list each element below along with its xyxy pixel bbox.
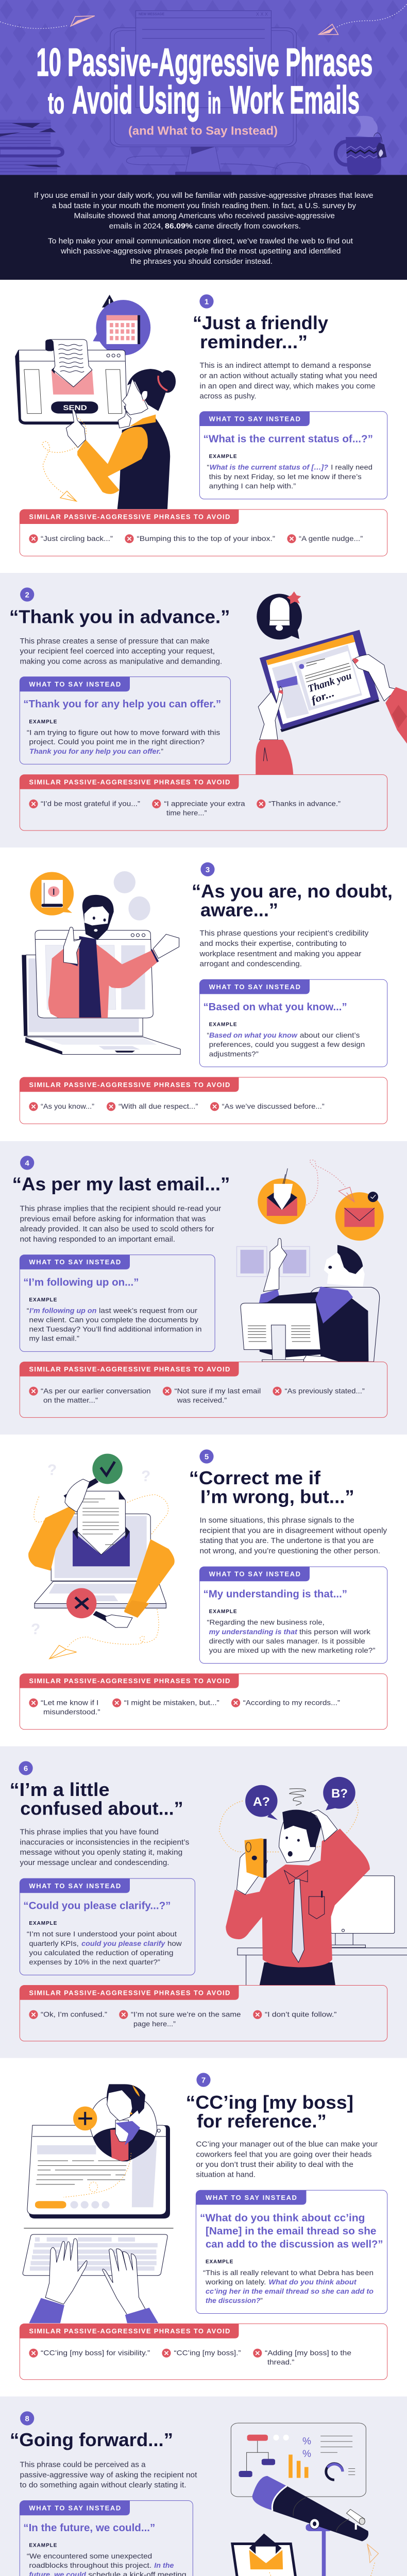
example text: preferences, could you suggest a few design [209,1041,365,1048]
example text: anything I can help with.” [209,482,296,490]
description: This phrase implies that you have found [20,1828,159,1837]
tab label: SIMILAR PASSIVE-AGGRESSIVE PHRASES TO AVOID [29,513,230,521]
tab label: SIMILAR PASSIVE-AGGRESSIVE PHRASES TO AVOID [29,1677,230,1685]
example text: Based on what you know [209,1031,298,1039]
description: or an action without actually stating what you need [200,372,377,380]
description: in an open and direct way, which makes you come [200,382,375,391]
example text: ” [260,2297,263,2304]
description: This phrase could be perceived as a [20,2461,146,2469]
avoid item 1: “As per our earlier conversation [41,1386,151,1395]
avoid item 3: “According to my records...” [243,1698,340,1706]
panel: similar phrases to avoid [20,1077,387,1124]
panel: what to say instead [20,2501,193,2576]
description [200,362,377,401]
suggested phrase: “What do you think about cc’ing [200,2212,365,2224]
number badge [199,1449,214,1464]
description: across as pushy. [200,393,257,401]
number badge: 3 [206,866,210,874]
avoid item 2: “Not sure if my last email [175,1386,261,1395]
avoid item 2: “I might be mistaken, but...” [124,1698,219,1706]
panel: what to say instead [199,412,387,499]
tab label [20,1878,130,1893]
subtitle: (and What to Say Instead) [128,124,278,137]
tab label: WHAT TO SAY INSTEAD [206,2194,297,2201]
avoid item 2: “CC’ing [my boss].” [174,2348,241,2357]
chart percent marks: % [302,2436,311,2447]
section 5 [0,1434,407,1747]
number badge: 5 [205,1453,209,1461]
section 2 [0,573,407,848]
panel: similar phrases to avoid [20,775,387,831]
avoid item 2: was received.” [177,1396,227,1404]
example text: cc’ing her in the email thread so she can add to [206,2287,374,2295]
heading: for reference.” [197,2110,327,2131]
example text: expenses by 10% in the next quarter?” [29,1958,160,1966]
title: to [48,87,64,120]
example text: “Regarding the new business role, [207,1619,325,1626]
avoid item 3 [253,2348,351,2366]
description: coworkers feel that you are going over their heads [196,2150,372,2159]
illustration: confused man with phone [219,1777,407,1985]
intro paragraph one: a bad taste in your mouth the moment you finish reading them. In fact, a U.S. survey by [52,202,357,210]
avoid item 2: time here...” [166,809,207,817]
example text: next Tuesday? You’ll find additional information in [29,1326,202,1333]
intro paragraph one: Mailsuite showed that among Americans who received passive-aggressive [74,212,335,221]
intro paragraph one [34,192,373,230]
description [196,2140,378,2179]
suggested phrase [200,2212,383,2250]
description: not wrong, and you’re questioning the other person. [200,1547,380,1555]
avoid item 2: page here...” [133,2020,176,2028]
example text: What do you think about [268,2278,357,2286]
example text [27,1930,182,1966]
heading [186,2092,353,2131]
tab label [20,1255,130,1269]
description: or you don’t trust their ability to deal with the [196,2161,353,2169]
panel: what to say instead [20,1255,215,1351]
example text [207,1619,376,1654]
avoid item 1: “Let me know if I [41,1698,98,1706]
description [20,1205,221,1244]
description: situation at hand. [196,2171,256,2179]
avoid item 3: “I don’t quite follow.” [265,2010,337,2018]
description: This phrase implies that the recipient should re-read your [20,1205,221,1213]
section 7 [0,2058,407,2397]
example text: In the [154,2562,174,2569]
tab label [20,2324,239,2338]
tab label [20,1674,239,1688]
example text: working on lately. [205,2278,266,2286]
tab label: SIMILAR PASSIVE-AGGRESSIVE PHRASES TO AVOID [29,778,230,786]
heading: I’m wrong, but...” [200,1486,354,1507]
avoid item 3: thread.” [267,2358,295,2366]
illustration: man pointing up at desk with envelopes [236,1160,384,1362]
description [20,2461,197,2489]
example text: “We encountered some unexpected [27,2552,152,2560]
suggested phrase: “In the future, we could...” [23,2522,155,2534]
panel: similar phrases to avoid [20,510,387,556]
intro panel [0,175,407,280]
suggested phrase: “What is the current status of...?” [203,433,373,445]
question marks: ? [47,1462,57,1479]
example text: quarterly KPIs, [29,1940,79,1947]
section 1 [0,280,407,573]
intro paragraph two: the phrases you should consider instead. [130,258,273,266]
description: inaccuracies or inconsistencies in the recipient’s [20,1839,189,1847]
avoid item 2: “I’m not sure we’re on the same [131,2010,241,2018]
example text: directly with our sales manager. Is it possible [209,1637,365,1645]
new message window label [139,11,268,16]
example text: “This is all really relevant to what Debra has been [203,2269,374,2277]
avoid item 2: “I appreciate your extra [164,800,245,808]
example label: EXAMPLE [209,1609,237,1615]
chart percent marks: % [302,2449,311,2460]
new message window label: X X X [256,11,268,16]
example text: you are mixed up with the new marketing role?” [209,1647,376,1654]
example label: EXAMPLE [29,1297,57,1303]
panel: what to say instead [199,1567,387,1663]
tablet handwritten note: for... [310,687,336,706]
avoid item 2 [163,1386,261,1404]
avoid item 1: “Ok, I’m confused.” [41,2010,107,2018]
tablet handwritten note [307,670,353,706]
description [20,637,222,666]
heading [193,312,328,352]
intro paragraph one: came directly from coworkers. [195,222,301,230]
illustration: telescope looking at email on laptop [230,2423,379,2576]
heading: “Just a friendly [193,312,328,333]
hero banner [0,0,407,175]
tab label [20,1077,239,1092]
heading: “As per my last email...” [12,1174,230,1195]
number badge [196,2073,211,2087]
description: In some situations, this phrase signals to the [200,1517,354,1525]
example label: EXAMPLE [209,1022,237,1027]
description: workplace resentment and making you appear [199,950,361,958]
tab label: WHAT TO SAY INSTEAD [29,2504,121,2512]
speech bubble letters: A? [253,1795,270,1809]
description: already provided. It can also be used to scold others for [20,1225,214,1233]
example label: EXAMPLE [29,2543,57,2548]
title: Avoid Using [72,78,200,122]
illustration: magnifiers over laptop with envelope [28,1454,175,1659]
example text: how [167,1940,182,1947]
avoid item 2: “With all due respect...” [118,1102,198,1110]
avoid item 1: misunderstood.” [43,1707,100,1716]
heading [189,1467,354,1507]
avoid item 3: “A gentle nudge...” [299,534,363,543]
suggested phrase: “Based on what you know...” [203,1002,347,1013]
question marks: ? [31,1621,40,1638]
example text: my understanding is that [209,1628,298,1636]
tab label [199,979,310,994]
example text: adjustments?” [209,1050,259,1058]
example text: I’m following up on [29,1307,96,1315]
description: passive-aggressive way of asking the recipient not [20,2471,197,2479]
tab label [20,510,239,524]
tab label: SIMILAR PASSIVE-AGGRESSIVE PHRASES TO AVOID [29,1365,230,1373]
suggested phrase: “Could you please clarify...?” [23,1901,171,1912]
tab label [199,1567,310,1581]
avoid item 3: “Thanks in advance.” [268,800,341,808]
example text: Thank you for any help you can offer. [29,748,161,755]
number badge [20,1156,34,1170]
tab label: WHAT TO SAY INSTEAD [209,415,300,423]
tab label [20,775,239,789]
illustration: bearded man on laptop [22,871,180,1055]
heading: reminder...” [200,331,308,352]
illustration: desk with monitor, books and mug [0,4,407,175]
description: to do something again without clearly stating it. [20,2481,186,2489]
illustration: woman pressing send [15,295,176,509]
tab label [20,1986,239,2000]
new message window label: NEW MESSAGE [139,12,164,16]
description: This phrase questions your recipient’s credibility [200,929,369,938]
example text [27,728,220,755]
avoid item 1: “As you know...” [41,1102,94,1110]
avoid item 2 [119,2010,241,2028]
suggested phrase: “I’m following up on...” [23,1277,139,1288]
heading: “As you are, no doubt, [192,880,393,902]
description [200,1517,387,1555]
avoid item 3: “As previously stated...” [285,1386,365,1395]
example text: you calculated the reduction of operating [29,1949,174,1957]
number badge: 6 [24,1764,28,1773]
heading: “Thank you in advance.” [9,606,230,627]
tab label: WHAT TO SAY INSTEAD [29,1258,121,1266]
description [199,929,369,968]
description: This phrase creates a sense of pressure that can make [20,637,210,646]
example text: “I am trying to figure out how to move forward with this [27,728,220,737]
tab label: WHAT TO SAY INSTEAD [209,983,300,991]
description: making you come across as manipulative and demanding. [20,657,222,666]
tab label [20,1362,239,1377]
title: in [208,87,221,120]
illustration: woman in email window above keyboard [23,2084,174,2323]
example label: EXAMPLE [209,454,237,460]
avoid item 2 [152,800,245,817]
intro paragraph two [48,237,353,266]
illustration: tablet with thank you note [256,591,407,775]
description: not having responded to an important email. [20,1235,175,1244]
heading: aware...” [200,899,278,920]
example label: EXAMPLE [29,1921,57,1926]
example text: this person will work [299,1628,370,1636]
example text: roadblocks throughout this project. [29,2562,151,2569]
avoid item 1: “CC’ing [my boss] for visibility.” [41,2348,150,2357]
intro paragraph one: If you use email in your daily work, you will be familiar with passive-aggressive phrases that leave [34,192,373,200]
speech bubble letters: B? [331,1787,348,1801]
example text: project. Could you point me in the right direction? [29,738,205,746]
example text: new client. Can you complete the documents by [29,1316,198,1324]
example text [207,464,372,490]
tab label: SIMILAR PASSIVE-AGGRESSIVE PHRASES TO AVOID [29,1081,230,1089]
number badge: 2 [25,590,29,600]
number badge [200,862,215,876]
number badge [199,294,214,309]
example text: could you please clarify [81,1940,166,1947]
description [20,1828,189,1867]
intro paragraph one: 86.09% [165,222,193,230]
description: your message unclear and condescending. [20,1859,169,1867]
example text: ” [161,748,163,755]
panel: similar phrases to avoid [20,1362,387,1417]
number badge: 7 [201,2076,206,2084]
panel: what to say instead [20,677,230,764]
panel: what to say instead [199,979,387,1067]
example text: “I’m not sure I understood your point about [27,1930,177,1938]
avoid item 1: on the matter...” [43,1396,98,1404]
chart percent marks [302,2436,311,2460]
heading: “I’m a little [10,1779,110,1800]
example text: “ [207,1031,209,1039]
example label: EXAMPLE [206,2259,233,2265]
example text [27,1307,202,1343]
description: and mocks their expertise, contributing to [200,940,347,948]
panel: similar phrases to avoid [20,2324,387,2380]
number badge: 4 [25,1159,30,1167]
tab label [20,2501,130,2515]
panel: similar phrases to avoid [20,1674,387,1730]
suggested phrase: “My understanding is that...” [203,1589,347,1600]
speech bubble letters [253,1787,348,1809]
tab label: WHAT TO SAY INSTEAD [29,680,121,688]
number badge: 8 [25,2414,29,2424]
tab label: SIMILAR PASSIVE-AGGRESSIVE PHRASES TO AVOID [29,2327,230,2335]
description: previous email before asking for information that was [20,1215,206,1223]
heading [192,880,393,920]
heading: confused about...” [20,1798,183,1819]
suggested phrase: [Name] in the email thread so she [206,2226,376,2237]
avoid item 1: “I’d be most grateful if you...” [41,800,140,808]
tab label [199,412,310,426]
question marks: ? [141,1468,150,1485]
number badge [19,1761,33,1775]
avoid item 1 [29,1698,100,1716]
section 4 [0,1141,407,1434]
example text: last week’s request from our [99,1307,197,1315]
tab label [196,2190,306,2205]
description: CC’ing your manager out of the blue can make your [196,2140,378,2148]
description: stating that you are. The undertone is that you are [200,1537,374,1545]
example text [27,2552,186,2576]
example text: What is the current status of […]? [210,464,329,471]
example label: EXAMPLE [29,719,57,725]
description: your recipient feel coerced into accepting your request, [20,647,215,655]
example text: the discussion? [206,2297,261,2304]
tab label: WHAT TO SAY INSTEAD [209,1570,300,1578]
heading: “Correct me if [189,1467,321,1488]
title [36,41,373,122]
example text [207,1031,365,1058]
example text: about our client’s [300,1031,360,1039]
description: arrogant and condescending. [200,960,302,968]
intro paragraph one: emails in 2024, [109,222,163,230]
panel: similar phrases to avoid [20,1986,387,2041]
question marks [31,1462,150,1638]
description: message without you openly stating it, making [20,1849,182,1857]
example text [203,2269,374,2304]
heading [10,1779,183,1819]
example text: “ [27,1307,29,1315]
send button label: SEND [63,403,87,412]
avoid item 3: “As we’ve discussed before...” [222,1102,325,1110]
avoid item 1: “Just circling back...” [41,534,113,543]
intro paragraph two: which passive-aggressive phrases people find the most upsetting and identified [60,247,341,256]
avoid item 2: “Bumping this to the top of your inbox.” [137,534,275,543]
panel: what to say instead [196,2190,387,2313]
example text: my last email.” [29,1335,79,1343]
heading: “CC’ing [my boss] [186,2092,353,2113]
example text: I really need [331,464,372,471]
section 6 [0,1747,407,2058]
intro paragraph two: To help make your email communication more direct, we’ve trawled the web to find out [48,237,353,245]
section 3 [0,848,407,1141]
tab label: WHAT TO SAY INSTEAD [29,1882,121,1890]
description: recipient that you are in disagreement without openly [200,1527,387,1535]
tablet handwritten note: Thank you [307,670,353,694]
avoid item 3: “Adding [my boss] to the [265,2348,351,2357]
section 8 [0,2397,407,2576]
example text: “ [207,464,209,471]
heading: “Going forward...” [10,2429,173,2450]
example text: this by next Friday, so let me know if there’s [209,473,362,481]
tab label [20,677,130,691]
number badge [20,2411,34,2426]
suggested phrase: “Thank you for any help you can offer.” [23,699,221,710]
description: This is an indirect attempt to demand a response [200,362,371,370]
number badge [20,587,34,602]
suggested phrase: can add to the discussion as well?” [206,2239,383,2250]
avoid item 1 [29,1386,151,1404]
number badge: 1 [205,298,209,306]
panel: what to say instead [20,1878,195,1975]
tab label: SIMILAR PASSIVE-AGGRESSIVE PHRASES TO AVOID [29,1989,230,1996]
